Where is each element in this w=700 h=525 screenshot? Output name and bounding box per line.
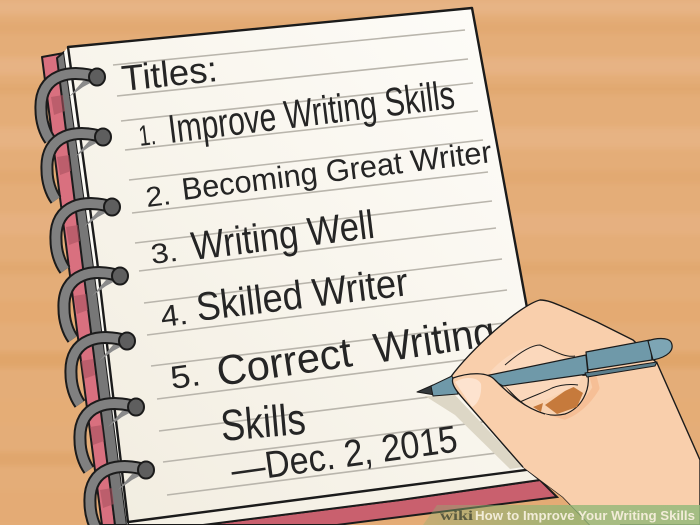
ring 4 bbox=[64, 268, 128, 339]
hand: back of hand and palm bbox=[450, 300, 700, 525]
hand: thumb outline bbox=[452, 374, 545, 467]
hand: table seen through the gap bbox=[545, 386, 583, 414]
pen: clip bbox=[585, 362, 657, 377]
hand: table seen through the small gap bbox=[533, 403, 543, 412]
hand: thumb nail highlight bbox=[455, 378, 481, 407]
ruled lines bbox=[113, 30, 536, 495]
list item 5 continued: Skills bbox=[219, 395, 308, 451]
ring 1 bbox=[41, 68, 105, 140]
list heading: Titles: Titles: bbox=[120, 48, 219, 99]
list item 3 bbox=[149, 203, 377, 270]
list item 3: Writing Well bbox=[189, 203, 377, 269]
pen: barrel bbox=[485, 355, 588, 386]
list item 5: 5. bbox=[168, 356, 203, 396]
list item 1 bbox=[137, 73, 457, 153]
ring 5 bbox=[71, 332, 135, 404]
list item 3: 3. bbox=[149, 236, 180, 270]
watermark: wiki: wiki bbox=[440, 509, 473, 524]
pen: grip bbox=[586, 340, 652, 370]
watermark banner bbox=[423, 505, 700, 525]
list item 1: 1. bbox=[137, 119, 158, 153]
list item 1: Improve Writing Skills bbox=[166, 73, 457, 152]
hand: shading around the gap bbox=[500, 372, 596, 419]
list item 5: Correct bbox=[213, 328, 355, 395]
pen bbox=[417, 338, 672, 396]
list item 2: 2. bbox=[144, 179, 173, 213]
hand: gap between thumb and fingers bbox=[500, 375, 588, 415]
ring 3 bbox=[56, 198, 120, 270]
spiral binding rings bbox=[41, 68, 154, 525]
list item 5: Writing bbox=[370, 307, 498, 372]
hand: curled finger bbox=[490, 345, 585, 400]
list item 2: Becoming Great Writer bbox=[180, 134, 494, 207]
list item 4: 4. bbox=[159, 298, 190, 334]
pen: cap bbox=[648, 338, 672, 360]
ring 2 bbox=[47, 128, 111, 200]
ring 7 bbox=[90, 462, 154, 525]
hand: finger creases bbox=[505, 345, 578, 402]
hand: thumb bbox=[452, 374, 620, 525]
pen: cone bbox=[431, 376, 458, 396]
pen: tip bbox=[417, 385, 435, 395]
hand shadow on page bbox=[425, 395, 523, 469]
list item 4: Skilled Writer bbox=[194, 260, 411, 330]
watermark: article title: How to Improve Your Writing Skills bbox=[475, 508, 695, 523]
date line: —Dec. 2, 2015 bbox=[228, 419, 460, 492]
notebook cover: red spine and bottom bbox=[42, 47, 557, 525]
ring 6 bbox=[80, 398, 144, 470]
list item 5 bbox=[168, 307, 498, 396]
notebook page bbox=[68, 8, 556, 522]
hand holding pen bbox=[417, 300, 700, 525]
